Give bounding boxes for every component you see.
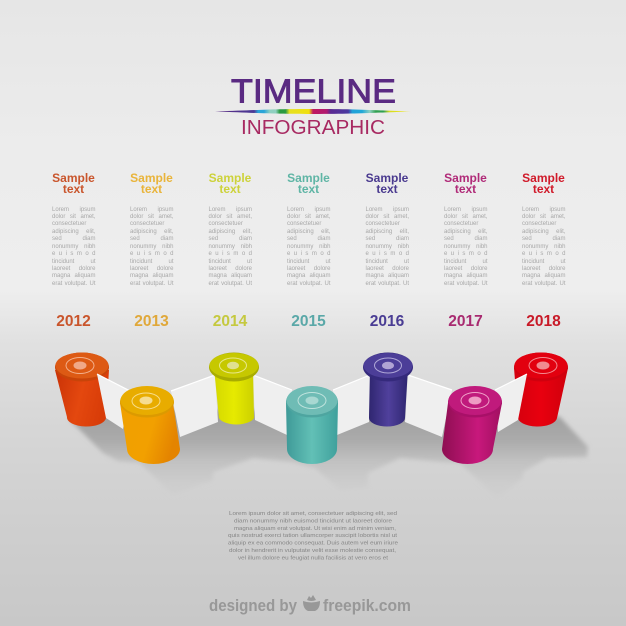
text column 2012: adipiscing elit, bbox=[52, 229, 96, 235]
text column 2016: nonummy nibh bbox=[366, 244, 409, 250]
text column 2014 bbox=[208, 206, 252, 287]
text column 2018: e u i s m o d bbox=[522, 251, 566, 257]
text column 2013: Lorem ipsum bbox=[130, 206, 174, 212]
text column 2012: magna aliquam bbox=[52, 273, 96, 279]
year 2013: 2013 bbox=[134, 313, 169, 330]
text column 2016: sed diam bbox=[366, 236, 409, 242]
text column 2018: adipiscing elit, bbox=[522, 229, 566, 235]
footer credit: designed by bbox=[209, 597, 298, 615]
bottom paragraph: quis nostrud exerci tation ullamcorper suscipit lobortis nisl ut bbox=[228, 533, 397, 539]
ground shadow bbox=[70, 410, 588, 498]
text column 2014: erat volutpat. Ut bbox=[208, 281, 252, 287]
year 2018: 2018 bbox=[526, 313, 561, 330]
text column 2016: laoreet dolore bbox=[366, 266, 409, 272]
text column 2016: erat volutpat. Ut bbox=[366, 281, 409, 287]
text column 2012: laoreet dolore bbox=[52, 266, 96, 272]
text column 2013: adipiscing elit, bbox=[130, 229, 174, 235]
text column 2015: laoreet dolore bbox=[287, 266, 330, 272]
text column 2017: laoreet dolore bbox=[444, 266, 488, 272]
text column 2018: tincidunt ut bbox=[522, 259, 566, 265]
text column 2014: Lorem ipsum bbox=[208, 206, 252, 212]
heading 2012: Sample bbox=[52, 171, 95, 185]
heading 2015: Sample bbox=[287, 171, 330, 185]
bottom paragraph: dolor in hendrerit in vulputate velit esse molestie consequat, bbox=[229, 548, 396, 554]
bottom paragraph: vel illum dolore eu feugiat nulla facilisis at vero eros et bbox=[238, 555, 388, 561]
heading 2016: text bbox=[376, 182, 398, 196]
text column 2016: magna aliquam bbox=[366, 273, 409, 279]
text column 2014: nonummy nibh bbox=[208, 244, 252, 250]
heading 2018 bbox=[522, 171, 565, 196]
bottom paragraph: diam nonummy nibh euismod tincidunt ut laoreet dolore bbox=[234, 518, 392, 524]
text column 2013 bbox=[130, 206, 174, 287]
bottom paragraph: aliquip ex ea commodo consequat. Duis autem vel eum iriure bbox=[228, 541, 398, 547]
text column 2017: nonummy nibh bbox=[444, 244, 488, 250]
heading 2014 bbox=[209, 171, 251, 196]
text column 2012: sed diam bbox=[52, 236, 96, 242]
text column 2016 bbox=[366, 206, 409, 287]
text column 2015: nonummy nibh bbox=[287, 244, 330, 250]
text column 2017: erat volutpat. Ut bbox=[444, 281, 488, 287]
text column 2014: e u i s m o d bbox=[208, 251, 252, 257]
text column 2013: e u i s m o d bbox=[130, 251, 174, 257]
text column 2012: nonummy nibh bbox=[52, 244, 96, 250]
heading 2016: Sample bbox=[366, 171, 408, 185]
text column 2017: magna aliquam bbox=[444, 273, 488, 279]
cylinder 2013 amber bbox=[120, 386, 180, 464]
text column 2013: laoreet dolore bbox=[130, 266, 174, 272]
text column 2013: tincidunt ut bbox=[130, 259, 174, 265]
bottom paragraph bbox=[228, 511, 398, 561]
heading 2017: text bbox=[455, 182, 476, 196]
cylinder 2015 teal bbox=[286, 386, 338, 464]
heading 2012: text bbox=[63, 182, 84, 196]
text column 2017: tincidunt ut bbox=[444, 259, 488, 265]
text column 2013: consectetuer bbox=[130, 221, 164, 227]
text column 2014: adipiscing elit, bbox=[208, 229, 252, 235]
text column 2012 bbox=[52, 206, 96, 287]
text column 2017: e u i s m o d bbox=[444, 251, 488, 257]
connecting white panels bbox=[97, 374, 527, 437]
text column 2018: dolor sit amet, bbox=[522, 214, 566, 220]
bottom paragraph: magna aliquam erat volutpat. Ut wisi enim ad minim veniam, bbox=[234, 526, 396, 532]
text column 2016: tincidunt ut bbox=[366, 259, 409, 265]
text column 2015: dolor sit amet, bbox=[287, 214, 330, 220]
year 2017: 2017 bbox=[448, 313, 483, 330]
text column 2015: consectetuer bbox=[287, 221, 321, 227]
text column 2017: Lorem ipsum bbox=[444, 206, 488, 212]
rainbow divider bbox=[215, 109, 411, 114]
text column 2018: sed diam bbox=[522, 236, 566, 242]
footer credit bbox=[209, 595, 411, 615]
text column 2016: Lorem ipsum bbox=[366, 206, 409, 212]
text column 2014: sed diam bbox=[208, 236, 252, 242]
cylinder 2014 yellow bbox=[209, 352, 259, 425]
heading 2014: text bbox=[219, 182, 241, 196]
year 2014: 2014 bbox=[213, 313, 247, 330]
text column 2012: tincidunt ut bbox=[52, 259, 96, 265]
text column 2013: erat volutpat. Ut bbox=[130, 281, 174, 287]
cylinder 2017 magenta bbox=[442, 386, 502, 464]
text column 2018: consectetuer bbox=[522, 221, 556, 227]
text column 2018: Lorem ipsum bbox=[522, 206, 566, 212]
text column 2018: nonummy nibh bbox=[522, 244, 566, 250]
heading 2016 bbox=[366, 171, 408, 196]
text column 2015: e u i s m o d bbox=[287, 251, 330, 257]
footer credit: freepik.com bbox=[323, 597, 411, 615]
heading 2018: text bbox=[533, 182, 554, 196]
text column 2015: Lorem ipsum bbox=[287, 206, 330, 212]
text column 2018: laoreet dolore bbox=[522, 266, 566, 272]
text column 2016: e u i s m o d bbox=[366, 251, 409, 257]
text column 2014: consectetuer bbox=[208, 221, 243, 227]
subtitle: INFOGRAPHIC: INFOGRAPHIC bbox=[241, 116, 385, 139]
text column 2013: sed diam bbox=[130, 236, 174, 242]
text column 2017 bbox=[444, 206, 488, 287]
icon: freepik logo bbox=[303, 595, 320, 611]
text column 2015: erat volutpat. Ut bbox=[287, 281, 330, 287]
text column 2012: erat volutpat. Ut bbox=[52, 281, 96, 287]
text column 2014: laoreet dolore bbox=[208, 266, 252, 272]
heading 2015 bbox=[287, 171, 330, 196]
cylinder 2018 red bbox=[514, 352, 568, 427]
text column 2016: adipiscing elit, bbox=[366, 229, 409, 235]
text column 2015: adipiscing elit, bbox=[287, 229, 330, 235]
text column 2014: tincidunt ut bbox=[208, 259, 252, 265]
heading 2012 bbox=[52, 171, 95, 196]
year 2015: 2015 bbox=[291, 313, 326, 330]
text column 2017: consectetuer bbox=[444, 221, 478, 227]
text column 2013: dolor sit amet, bbox=[130, 214, 174, 220]
heading 2015: text bbox=[298, 182, 319, 196]
text column 2017: dolor sit amet, bbox=[444, 214, 488, 220]
text column 2016: consectetuer bbox=[366, 221, 400, 227]
text column 2016: dolor sit amet, bbox=[366, 214, 409, 220]
text column 2017: adipiscing elit, bbox=[444, 229, 488, 235]
heading 2013 bbox=[130, 171, 173, 196]
text column 2015: magna aliquam bbox=[287, 273, 330, 279]
text column 2012: dolor sit amet, bbox=[52, 214, 96, 220]
text column 2018: magna aliquam bbox=[522, 273, 566, 279]
text column 2012: Lorem ipsum bbox=[52, 206, 96, 212]
year 2012: 2012 bbox=[56, 313, 91, 330]
text column 2018 bbox=[522, 206, 566, 287]
text column 2014: dolor sit amet, bbox=[208, 214, 252, 220]
text column 2015 bbox=[287, 206, 330, 287]
heading 2017 bbox=[444, 171, 487, 196]
text column 2015: sed diam bbox=[287, 236, 330, 242]
text column 2018: erat volutpat. Ut bbox=[522, 281, 566, 287]
text column 2012: consectetuer bbox=[52, 221, 86, 227]
bottom paragraph: Lorem ipsum dolor sit amet, consectetuer adipiscing elit, sed bbox=[229, 511, 397, 517]
heading 2017: Sample bbox=[444, 171, 487, 185]
heading 2018: Sample bbox=[522, 171, 565, 185]
text column 2013: magna aliquam bbox=[130, 273, 174, 279]
cylinder 2012 orange bbox=[55, 352, 109, 427]
cylinder 2016 purple bbox=[363, 352, 413, 426]
heading 2013: text bbox=[141, 182, 162, 196]
text column 2014: magna aliquam bbox=[208, 273, 252, 279]
year 2016: 2016 bbox=[370, 313, 404, 330]
text column 2015: tincidunt ut bbox=[287, 259, 330, 265]
title: TIMELINE: TIMELINE bbox=[231, 74, 396, 110]
text column 2012: e u i s m o d bbox=[52, 251, 96, 257]
heading 2013: Sample bbox=[130, 171, 173, 185]
heading 2014: Sample bbox=[209, 171, 251, 185]
text column 2013: nonummy nibh bbox=[130, 244, 174, 250]
text column 2017: sed diam bbox=[444, 236, 488, 242]
